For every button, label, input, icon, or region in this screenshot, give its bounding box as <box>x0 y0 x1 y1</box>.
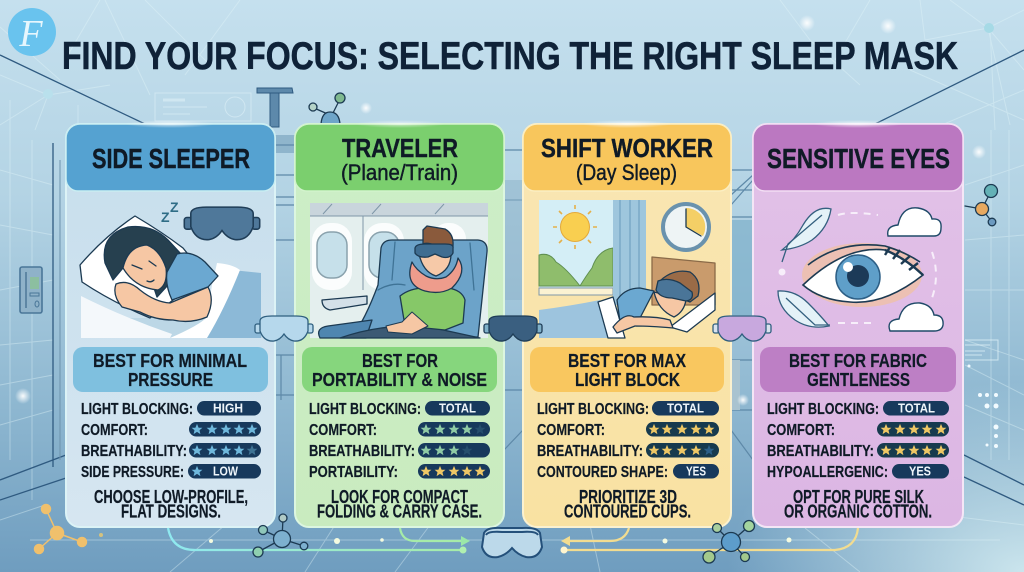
icon: sleep z's: Z <box>170 199 179 215</box>
illustration: traveler in plane seat <box>310 203 488 338</box>
gold molecule <box>34 504 103 554</box>
right-hand UI lines <box>965 340 998 360</box>
gap architecture <box>275 135 295 153</box>
tip: CHOOSE LOW-PROFILE, <box>94 487 248 507</box>
ratings: CONTOURED SHAPE: <box>537 464 668 481</box>
heading <box>341 133 458 185</box>
panel: shift worker <box>523 124 731 527</box>
wall control panel <box>20 267 42 313</box>
best-for banner <box>302 347 497 392</box>
tip: OPT FOR PURE SILK <box>793 487 924 507</box>
ratings: TOTAL <box>667 401 704 416</box>
ratings: BREATHABILITY: <box>309 443 415 460</box>
icon: purple mask <box>713 316 771 341</box>
ratings <box>767 401 949 481</box>
tip: CONTOURED CUPS. <box>564 502 691 522</box>
ratings: COMFORT: <box>309 422 377 439</box>
heading: (Day Sleep) <box>576 160 677 185</box>
heading: SIDE SLEEPER <box>92 143 250 174</box>
best-for banner <box>760 347 956 392</box>
ratings: COMFORT: <box>767 422 835 439</box>
heading: SENSITIVE EYES <box>767 143 950 174</box>
ratings: LIGHT BLOCKING: <box>309 401 421 418</box>
panel: traveler <box>295 124 504 527</box>
right molecule <box>965 184 998 226</box>
best-for banner: PRESSURE <box>128 369 213 390</box>
tip <box>784 487 932 522</box>
ratings: TOTAL <box>439 401 476 416</box>
tip <box>564 487 691 522</box>
ratings: LIGHT BLOCKING: <box>81 401 193 418</box>
ratings: YES <box>909 464 931 479</box>
arrow: yellow flow to centre mask <box>560 528 858 554</box>
card top glows <box>125 120 903 128</box>
best-for banner: BEST FOR MINIMAL <box>93 350 247 371</box>
icon: dark blue mask <box>484 316 542 341</box>
icon: centre goggle mask <box>482 528 542 557</box>
ratings: BREATHABILITY: <box>81 443 187 460</box>
ratings: BREATHABILITY: <box>767 443 874 460</box>
best-for banner: PORTABILITY & NOISE <box>312 369 487 390</box>
heading: SHIFT WORKER <box>541 133 713 163</box>
ratings <box>81 401 261 481</box>
heading <box>541 133 713 185</box>
tip <box>317 487 482 522</box>
dark molecule <box>253 514 308 557</box>
ratings: HIGH <box>213 401 243 416</box>
ratings: HYPOALLERGENIC: <box>767 464 888 481</box>
ratings: COMFORT: <box>81 422 148 439</box>
illustration: window, clock and day sleeper <box>539 200 715 338</box>
best-for banner <box>530 347 724 392</box>
ratings: PORTABILITY: <box>309 464 398 481</box>
illustration: eye with feathers and clouds <box>778 208 943 331</box>
ratings <box>309 401 490 481</box>
ratings: LIGHT BLOCKING: <box>767 401 879 418</box>
card header <box>295 124 504 191</box>
icon: dark mask <box>184 207 260 240</box>
card body <box>295 124 504 527</box>
panel: side sleeper <box>66 124 275 527</box>
card body <box>753 124 963 527</box>
top molecule <box>309 93 345 124</box>
dark perspective lines <box>0 50 1024 505</box>
illustration: woman sleeping on her side <box>80 216 262 338</box>
heading: (Plane/Train) <box>341 160 458 185</box>
best-for banner: BEST FOR <box>362 350 438 371</box>
ratings: LIGHT BLOCKING: <box>537 401 649 418</box>
card header <box>66 124 275 191</box>
card body <box>66 124 275 527</box>
panel: sensitive eyes <box>753 124 963 527</box>
best-for banner <box>73 347 268 392</box>
card header <box>753 124 963 191</box>
best-for banner: BEST FOR FABRIC <box>789 350 927 371</box>
ratings: TOTAL <box>898 401 935 416</box>
heading: TRAVELER <box>342 133 458 163</box>
tip: PRIORITIZE 3D <box>579 487 677 507</box>
best-for banner: GENTLENESS <box>807 369 910 390</box>
icon: light blue mask <box>255 316 313 341</box>
ratings: SIDE PRESSURE: <box>81 464 184 481</box>
ratings: COMFORT: <box>537 422 605 439</box>
glowing dots <box>209 538 792 544</box>
icon: sleep z's <box>161 199 179 225</box>
card body <box>523 124 731 527</box>
tip: FOLDING & CARRY CASE. <box>317 502 482 522</box>
ratings <box>537 401 719 481</box>
icon: sleep z's: Z <box>161 209 170 225</box>
logo <box>8 8 56 56</box>
ratings: BREATHABILITY: <box>537 443 643 460</box>
logo: F <box>18 13 43 55</box>
arrow: blue-green flow to centre mask <box>168 528 470 554</box>
best-for banner: LIGHT BLOCK <box>575 369 681 390</box>
lamp post <box>257 88 293 127</box>
blue molecule <box>703 520 754 563</box>
best-for banner: BEST FOR MAX <box>568 350 687 371</box>
tip: LOOK FOR COMPACT <box>331 487 468 507</box>
ratings: LOW <box>213 464 239 479</box>
tip <box>94 487 248 522</box>
faint wall screen <box>155 93 251 121</box>
ratings: YES <box>686 464 706 479</box>
card header <box>523 124 731 191</box>
tip: FLAT DESIGNS. <box>121 502 221 522</box>
tip: OR ORGANIC COTTON. <box>784 502 932 522</box>
